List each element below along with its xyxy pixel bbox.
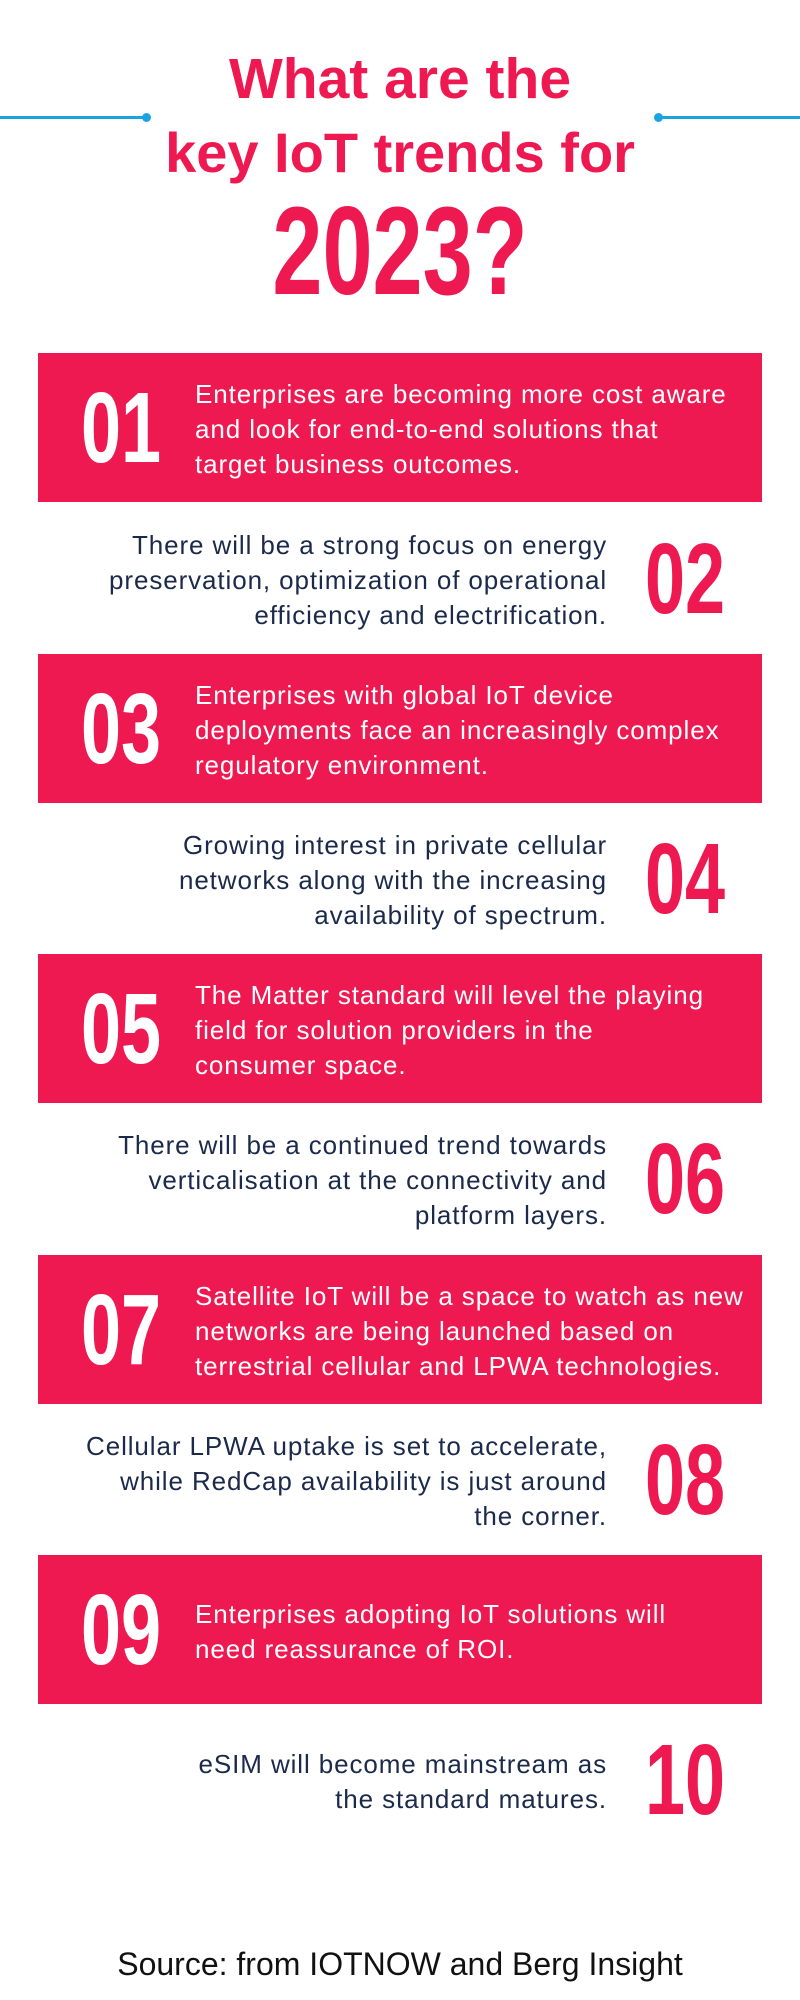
text 03: deployments face an increasingly complex — [195, 715, 719, 745]
text 10 — [199, 1748, 607, 1814]
text 04: networks along with the increasing — [179, 865, 607, 895]
text 01: target business outcomes. — [195, 449, 521, 479]
text 04 — [179, 830, 607, 930]
text 01: Enterprises are becoming more cost aware — [195, 379, 727, 409]
text 10: the standard matures. — [335, 1784, 607, 1814]
text 09 — [195, 1598, 666, 1664]
text 07: networks are being launched based on — [195, 1316, 674, 1346]
number 07: 07 — [81, 1274, 161, 1386]
text 09: Enterprises adopting IoT solutions will — [195, 1598, 666, 1628]
text 10: eSIM will become mainstream as — [199, 1748, 607, 1778]
text 02: preservation, optimization of operational — [109, 565, 607, 595]
text 07: Satellite IoT will be a space to watch as new — [195, 1281, 744, 1311]
title line 2: key IoT trends for — [165, 121, 635, 184]
number 05: 05 — [81, 972, 161, 1084]
panel: trend 03 — [38, 654, 762, 803]
panel: trend 02 — [109, 522, 725, 634]
panel: trend 01 — [38, 353, 762, 502]
text 09: need reassurance of ROI. — [195, 1634, 514, 1664]
number 02: 02 — [645, 522, 725, 634]
panel: trend 10 — [199, 1724, 725, 1836]
title year: 2023? — [272, 182, 528, 321]
number 06: 06 — [645, 1122, 725, 1234]
text 03: regulatory environment. — [195, 750, 489, 780]
text 02 — [109, 530, 607, 630]
text 07 — [195, 1281, 744, 1381]
panel: trend 05 — [38, 954, 762, 1103]
text 02: efficiency and electrification. — [254, 600, 607, 630]
number 10: 10 — [645, 1724, 725, 1836]
source footer: Source: from IOTNOW and Berg Insight — [117, 1946, 683, 1982]
panel: trend 06 — [118, 1122, 725, 1234]
panel: trend 09 — [38, 1555, 762, 1704]
panel: trend 07 — [38, 1255, 762, 1404]
text 05 — [195, 980, 704, 1080]
text 01: and look for end-to-end solutions that — [195, 414, 658, 444]
panel: trend 08 — [86, 1424, 725, 1536]
text 08: the corner. — [474, 1501, 607, 1531]
text 03 — [195, 680, 719, 780]
text 04: Growing interest in private cellular — [183, 830, 607, 860]
text 04: availability of spectrum. — [314, 900, 607, 930]
text 01 — [195, 379, 727, 479]
number 09: 09 — [81, 1574, 161, 1686]
text 06 — [118, 1130, 607, 1230]
text 06: There will be a continued trend towards — [118, 1130, 607, 1160]
text 02: There will be a strong focus on energy — [132, 530, 607, 560]
text 05: consumer space. — [195, 1050, 406, 1080]
panel: trend 04 — [179, 822, 725, 934]
text 05: The Matter standard will level the playing — [195, 980, 704, 1010]
text 08: while RedCap availability is just around — [120, 1466, 607, 1496]
decorative line right — [657, 116, 800, 119]
decorative line left — [0, 116, 148, 119]
text 08 — [86, 1431, 607, 1531]
text 05: field for solution providers in the — [195, 1015, 594, 1045]
text 07: terrestrial cellular and LPWA technologies. — [195, 1351, 721, 1381]
number 08: 08 — [645, 1424, 725, 1536]
text 06: verticalisation at the connectivity and — [148, 1165, 607, 1195]
title line 1: What are the — [229, 47, 571, 111]
number 01: 01 — [81, 372, 161, 484]
number 03: 03 — [81, 672, 161, 784]
title — [165, 47, 635, 321]
text 03: Enterprises with global IoT device — [195, 680, 614, 710]
text 06: platform layers. — [415, 1200, 607, 1230]
text 08: Cellular LPWA uptake is set to accelerate, — [86, 1431, 607, 1461]
number 04: 04 — [645, 822, 725, 934]
